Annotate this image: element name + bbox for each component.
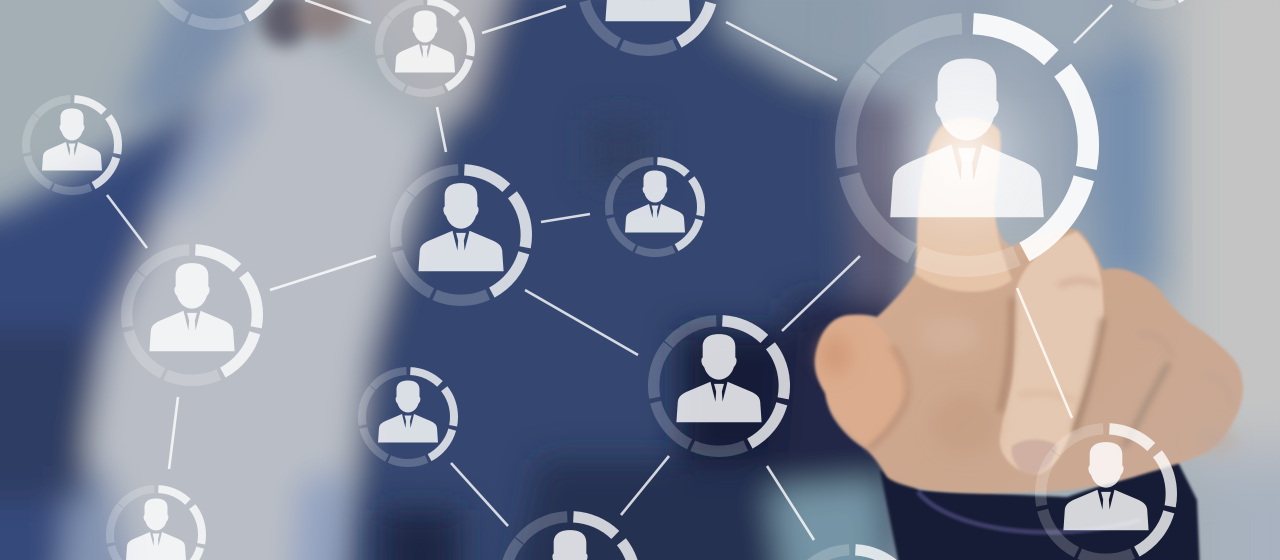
fingernail bbox=[1011, 440, 1057, 474]
node: centre bbox=[396, 170, 526, 300]
node: bottom left small bbox=[110, 489, 202, 560]
folded front finger bbox=[1000, 232, 1103, 474]
thumb bbox=[815, 315, 910, 445]
connector lines bbox=[107, 0, 1112, 540]
selected node ring bbox=[846, 24, 1088, 266]
hand pointing at the network bbox=[815, 117, 1243, 493]
node: top partial bbox=[379, 1, 471, 93]
node: bottom centre partial bbox=[505, 517, 635, 560]
node: left small bbox=[26, 99, 118, 191]
sleeve and cuff bbox=[880, 460, 1200, 560]
hair shadow bbox=[261, 0, 353, 46]
selected node person bbox=[890, 59, 1044, 217]
node: centre right small bbox=[609, 161, 701, 253]
index finger above the hand bbox=[915, 117, 1012, 292]
node: beneath the hand bbox=[1041, 429, 1171, 559]
node: lower small bbox=[362, 371, 454, 463]
glow at fingertip bbox=[840, 30, 1090, 280]
node: top-right partial bbox=[1110, 0, 1202, 5]
node: top-left partial bbox=[151, 0, 281, 24]
node: selected large node under fingertip bbox=[846, 24, 1088, 266]
node: bottom partial bbox=[787, 550, 917, 560]
node: lower centre bbox=[654, 321, 784, 451]
node: left large bbox=[127, 250, 257, 380]
node: top centre partial bbox=[583, 0, 713, 50]
